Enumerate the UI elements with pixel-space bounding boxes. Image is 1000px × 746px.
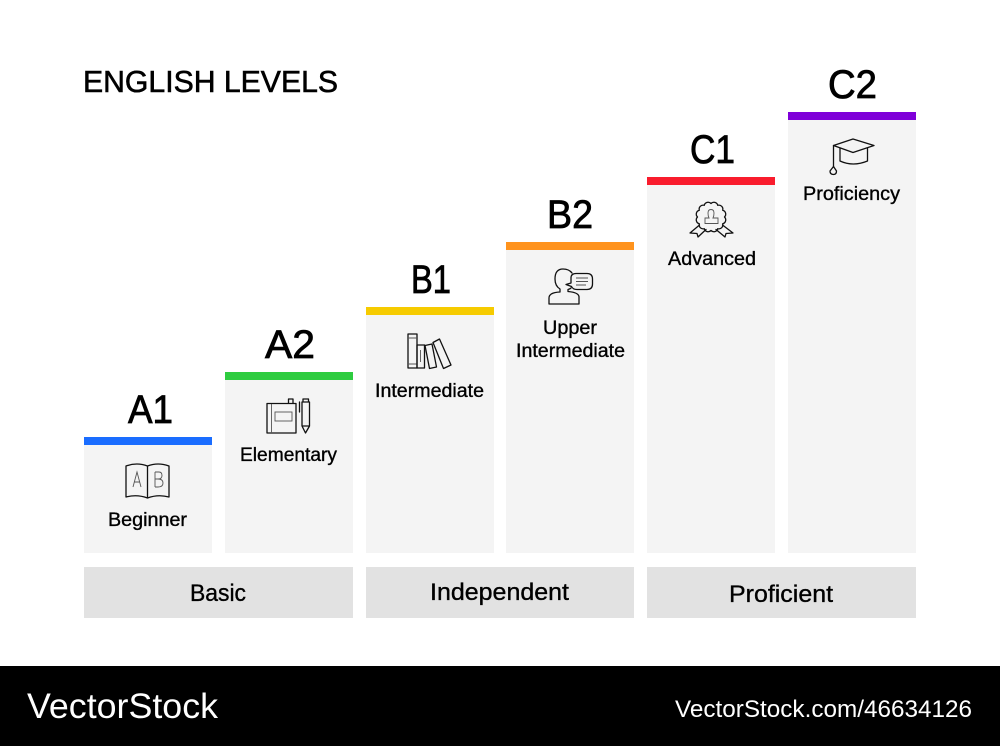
group: Proficient <box>647 567 916 618</box>
B1 heading: B1 <box>411 258 451 302</box>
footer: VectorStock watermark: VectorStock.com/46634126 <box>675 696 972 723</box>
label: Elementary: Elementary <box>240 445 337 466</box>
B1 colour bar <box>366 307 494 315</box>
B2 colour bar <box>506 242 634 250</box>
icon: graduation cap <box>830 139 874 174</box>
A2 heading: A2 <box>265 323 315 367</box>
C1 colour bar <box>647 177 775 185</box>
panel: A1 Beginner <box>84 388 212 553</box>
label: Advanced: Advanced <box>668 249 756 270</box>
footer: VectorStock watermark: VectorStock <box>27 687 219 726</box>
group: Proficient: Proficient <box>729 581 833 608</box>
label: Beginner: Beginner <box>108 510 188 531</box>
C2 heading: C2 <box>828 63 877 107</box>
panel: C2 Proficiency <box>788 63 916 553</box>
label: Proficiency: Proficiency <box>803 184 901 205</box>
group: Independent: Independent <box>430 579 569 606</box>
icon: notebook and pen <box>267 399 310 433</box>
group: Basic: Basic <box>190 580 246 607</box>
A2 colour bar <box>225 372 353 380</box>
footer: VectorStock watermark <box>0 666 1000 746</box>
C2 colour bar <box>788 112 916 120</box>
group: Basic <box>84 567 353 618</box>
icon: open book <box>126 464 169 498</box>
icon: person speaking <box>549 269 592 304</box>
label: Upper Intermediate <box>516 318 625 362</box>
title: ENGLISH LEVELS <box>83 64 338 99</box>
group: Independent <box>366 567 634 618</box>
panel: B1 Intermediate <box>366 258 494 553</box>
label: Upper Intermediate: Intermediate <box>516 341 625 362</box>
C1 heading: C1 <box>690 128 735 172</box>
label: Intermediate: Intermediate <box>375 381 484 402</box>
label: Upper Intermediate: Upper <box>543 318 598 339</box>
A1 heading: A1 <box>128 388 173 432</box>
icon: award badge <box>690 202 733 237</box>
panel: C1 Advanced <box>647 128 775 553</box>
panel: A2 Elementary <box>225 323 353 553</box>
A1 colour bar <box>84 437 212 445</box>
panel: B2 Upper Intermediate <box>506 193 634 553</box>
B2 heading: B2 <box>547 193 593 237</box>
icon: books <box>408 334 451 368</box>
